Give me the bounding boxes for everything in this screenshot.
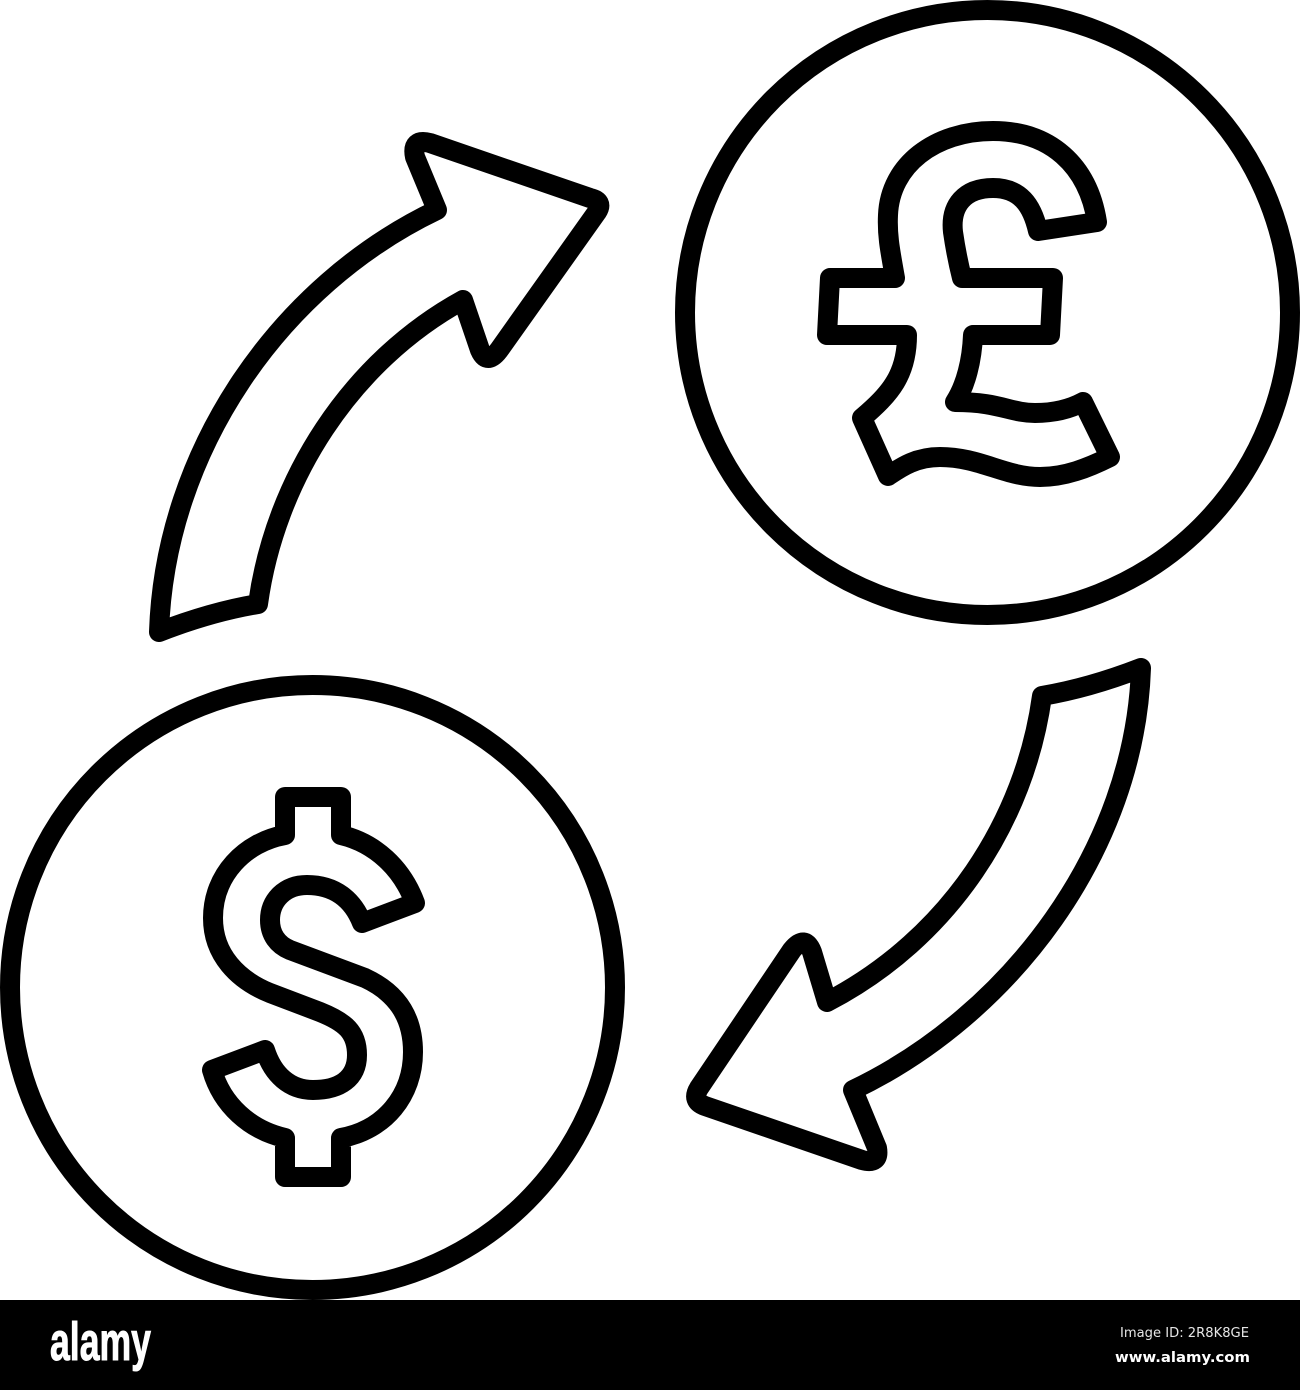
footer bar: [0, 1300, 1300, 1390]
icon: pound coin: [685, 10, 1290, 615]
icon: dollar coin: [10, 685, 615, 1290]
image id: Image ID: 2R8K8GE: [1120, 1326, 1249, 1341]
arrow: pound to dollar: [696, 668, 1141, 1161]
website: www.alamy.com: [1115, 1350, 1250, 1366]
arrow: dollar to pound: [159, 142, 599, 632]
brand logo text: alamy: [50, 1312, 151, 1372]
